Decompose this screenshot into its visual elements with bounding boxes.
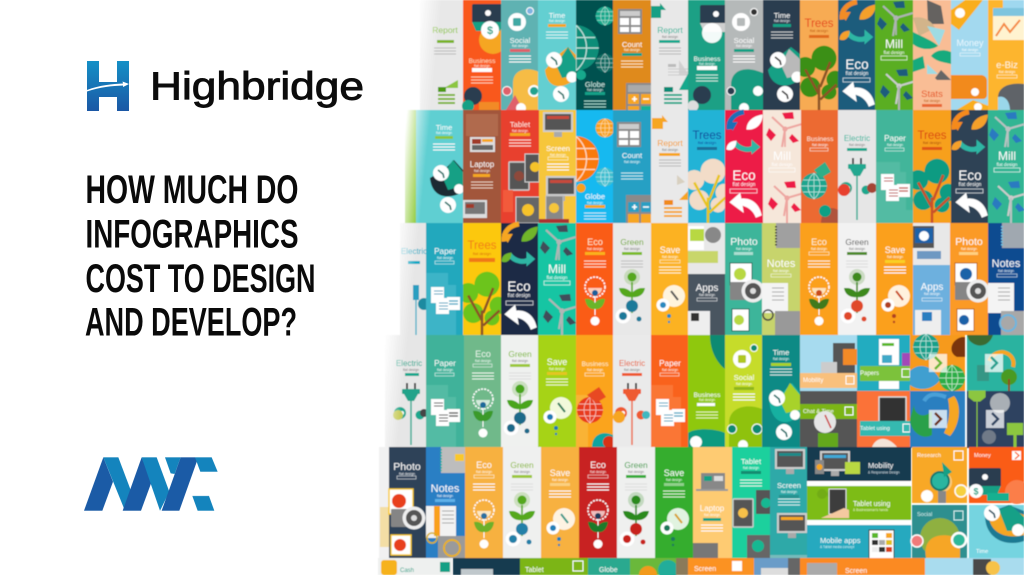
panel: Mobility banner navy: & Responsive Design (868, 470, 900, 474)
logo: MTC mark (84, 457, 218, 511)
panel: Green white row four: flat design (512, 359, 528, 363)
panel: Green white row five: Green (510, 460, 534, 470)
panel: Eco sage (464, 335, 501, 447)
panel: Mill green: flat design (884, 50, 905, 55)
panel: Count orange (613, 0, 651, 111)
panel: Photo navy row five: flat design (399, 472, 415, 476)
panel: Eco sage: flat design (475, 359, 491, 363)
panel: Green white row four (501, 335, 538, 447)
panel: Stats peach: Stats (921, 89, 943, 100)
panel: Green white: flat design (849, 247, 865, 251)
panel: Green white: Green (845, 237, 869, 247)
panel: Paper orange: flat design (662, 368, 678, 372)
panel: Screen banner orange: Screen (694, 566, 716, 573)
panel: Social teal: flat design (512, 44, 528, 48)
panel: Tablet using banner green (807, 486, 911, 520)
panel: Globe banner teal: Globe (599, 567, 618, 574)
title: COST TO DESIGN (86, 257, 316, 301)
panel: Mill teal (988, 110, 1024, 223)
panel: Count blue: Count (622, 151, 643, 160)
panel: Business amber: Business (582, 361, 609, 368)
panel: Laptop peach: flat design (704, 513, 720, 517)
panel: Screen teal: Screen (777, 481, 801, 490)
panel: Report orange: flat design (662, 148, 678, 152)
panel: Tablet using orange: Tablet using (860, 426, 890, 432)
panel: Screen yellow (539, 110, 576, 223)
panel: Tablet red: flat design (512, 129, 528, 133)
panel: Business amber: flat design (587, 368, 603, 372)
panel: Business orange: flat design (474, 64, 490, 68)
panel: Save green: flat design (666, 478, 682, 482)
fade of left collage edge (0, 0, 450, 447)
panel: Paper teal: Paper (884, 134, 906, 143)
panel: Time teal row two: flat design (436, 131, 452, 135)
panel: Report lime (420, 0, 463, 111)
panel: Eco navy: flat design (508, 293, 531, 299)
panel: Apps grey (688, 223, 725, 335)
panel: Tablet red (501, 110, 540, 223)
panel: Tablet banner green (520, 558, 588, 575)
panel: Photo teal (725, 223, 764, 335)
panel: Eco amber row five: Eco (476, 460, 492, 470)
panel: Notes lime: flat design (773, 269, 789, 273)
panel: laptop banner dark (453, 558, 520, 575)
panel: Photo teal: Photo (730, 236, 758, 248)
panel: Electric pale: Electric (619, 359, 645, 368)
panel: Count blue (613, 110, 651, 223)
panel: Save lime: flat design (549, 367, 565, 371)
panel: Save green (655, 447, 693, 558)
panel: Paper teal (876, 110, 913, 223)
panel: Cash banner (378, 558, 452, 575)
panel: Green white second: flat design (628, 470, 644, 474)
panel: lime sliver row two (405, 110, 419, 223)
panel: Screen yellow: flat design (550, 153, 566, 157)
panel: Save amber row five: flat design (552, 478, 568, 482)
panel: Chat and Time dark (800, 391, 857, 447)
panel: Mobility light blue (800, 335, 857, 391)
panel: Business orange row two: Business (807, 136, 834, 143)
title (85, 168, 316, 344)
panel: Save orange right: flat design (887, 255, 903, 259)
panel: Apps blue (913, 223, 950, 335)
panel: Eco red row five: flat design (590, 470, 606, 474)
panel: Paper cyan (426, 223, 464, 335)
panel: Mill turquoise: flat design (547, 275, 568, 280)
panel: Trees orange: Trees (918, 130, 947, 142)
panel: Paper green: Paper (434, 359, 456, 368)
panel: Social grey: Social (734, 36, 755, 45)
panel: Mobile apps banner teal: Mobile apps (820, 536, 861, 545)
panel: Mill teal: Mill (998, 149, 1016, 163)
panel: Eco red: flat design (733, 182, 756, 188)
panel: Green white second: Green (624, 460, 648, 470)
panel: Report teal: Report (657, 25, 683, 35)
panel: Money light blue (951, 0, 989, 111)
title: INFOGRAPHICS (86, 212, 298, 256)
panel: Paper cyan: flat design (437, 256, 453, 260)
panel: Tablet red: Tablet (510, 120, 531, 129)
panel: Globe sky blue: Globe (585, 192, 605, 201)
panel: Paper orange (651, 335, 688, 447)
panel: Laptop peach: Laptop (700, 504, 725, 513)
panel: Eco orange: Eco (587, 237, 603, 247)
panel: Time deep teal (762, 335, 800, 447)
panel: Save orange: Save (660, 245, 680, 255)
panel: Eco red row five (579, 447, 617, 558)
panel: Notes lime: Notes (767, 258, 796, 270)
panel: Electric pale (613, 335, 651, 447)
panel: Tablet using banner green: Tablet using (853, 501, 890, 508)
panel: Trees blue: flat design (698, 140, 716, 145)
panel: Screen banner orange two (800, 558, 925, 575)
panel: e-Biz orange: flat design (999, 70, 1015, 74)
panel: monitor banner blue (754, 558, 800, 575)
panel: Money tile: $ (973, 486, 979, 496)
panel: Eco dark: flat design (959, 182, 982, 188)
panel: Eco red row five: Eco (590, 460, 606, 470)
panel: Mill cream (763, 110, 804, 223)
panel: Social grey: flat design (736, 44, 752, 48)
panel: Business lime: Business (694, 392, 721, 399)
panel: Social tile (911, 505, 967, 558)
panel: Eco red (725, 110, 763, 223)
panel: Screen banner orange (688, 558, 754, 575)
panel: Mobile apps banner teal: & Tablet media concept (820, 545, 854, 549)
panel: Apps grey: flat design (699, 293, 715, 297)
panel: Save orange right: Save (885, 245, 905, 255)
panel: Paper teal: flat design (887, 143, 903, 147)
panel: Social tile: Social (917, 512, 932, 518)
panel: Business orange: $ (487, 25, 493, 37)
panel: Paper green: flat design (437, 368, 453, 372)
panel: Green white row four: Green (508, 349, 532, 359)
panel: Trees orange: flat design (923, 140, 941, 145)
panel: Laptop brown: Laptop (470, 160, 495, 169)
panel: Time light teal: flat design (549, 19, 565, 23)
panel: Eco dark: Eco (958, 168, 982, 183)
panel: Trees yellow (462, 222, 502, 336)
panel: faded strip left of row five (379, 447, 389, 558)
panel: Cash banner: Cash (400, 568, 414, 574)
panel: e-Biz orange (988, 0, 1024, 111)
panel: Mill teal: flat design (997, 162, 1018, 167)
collage of infographic panels (378, 0, 1024, 575)
panel: Notes blue (426, 447, 465, 558)
panel: Photo orange (950, 223, 990, 335)
panel: Time teal row two (416, 110, 464, 223)
panel: Eco sage: Eco (475, 349, 491, 359)
panel: Green white row five (503, 447, 541, 558)
panel: Money tile: Money (974, 453, 991, 459)
panel: Mill turquoise: Mill (548, 262, 566, 276)
panel: Laptop brown (463, 110, 501, 223)
panel: Globe dark teal: flat design (587, 88, 603, 92)
panel: e-Biz orange: e-Biz (996, 60, 1018, 71)
panel: Business green: Business (694, 56, 721, 63)
panel: pale blue banner (925, 558, 1024, 575)
panel: Count orange: flat design (624, 48, 640, 52)
title: HOW MUCH DO (86, 168, 298, 212)
panel: Time light teal (538, 0, 578, 111)
panel: Eco navy: Eco (507, 279, 531, 294)
panel: Time navy: Time (774, 11, 790, 20)
panel: Green white second (617, 447, 655, 558)
panel: Stats peach (913, 0, 951, 111)
panel: Green grey (613, 223, 651, 335)
panel: Notes blue: Notes (431, 483, 460, 495)
panel: Trees peach: flat design (810, 28, 828, 33)
panel: Report teal: flat design (662, 35, 678, 39)
panel: Trees blue: Trees (693, 130, 722, 142)
panel: Research tile (912, 447, 967, 503)
panel: Screen teal (770, 447, 807, 558)
panel: Photo navy row five: Photo (393, 461, 421, 473)
panel: Time navy: flat design (774, 19, 790, 23)
panel: Apps grey: Apps (696, 283, 718, 294)
panel: Mill green (875, 0, 916, 111)
panel: Eco orange: flat design (587, 247, 603, 251)
panel: Business lime: flat design (699, 398, 715, 402)
panel: Time light teal: Time (549, 11, 565, 20)
panel: Electric grey row four (385, 335, 428, 447)
panel: Stats peach: flat design (924, 99, 940, 103)
panel: Time tile (969, 505, 1024, 558)
panel: Mobility banner navy: Mobility (868, 461, 894, 470)
panel: Mill cream: flat design (772, 162, 793, 167)
panel: Report lime: Report (432, 25, 458, 35)
panel: Electric pale: flat design (624, 368, 640, 372)
panel: tile phone blue (910, 391, 965, 448)
panel: Social yellow green: flat design (736, 382, 752, 386)
panel: Screen banner orange two: Screen (845, 568, 867, 575)
panel: Time navy (763, 0, 802, 111)
panel: Eco orange row three right: flat design (811, 247, 827, 251)
panel: Time deep teal: flat design (773, 357, 789, 361)
panel: Save lime: Save (547, 357, 567, 367)
panel: Trees yellow: Trees (468, 240, 497, 252)
panel: Business orange: Business (469, 58, 496, 65)
panel: Electric grey (838, 110, 877, 223)
panel: Business green (688, 0, 732, 112)
panel: Paper orange: Paper (659, 359, 681, 368)
panel: Eco orange (576, 223, 613, 335)
panel: tile tree teal (967, 335, 1024, 391)
panel: Photo orange: Photo (955, 236, 983, 248)
panel: Save lime (538, 335, 576, 447)
panel: Money light blue: flat design (962, 48, 978, 52)
panel: Tablet banner green: Tablet (525, 567, 544, 574)
panel: Trees peach (799, 0, 839, 111)
panel: tile plug navy (967, 391, 1024, 448)
panel: Mobile apps banner teal (807, 525, 911, 560)
panel: Money light blue: Money (956, 38, 984, 48)
panel: Money tile (969, 447, 1024, 504)
panel: Green grey: Green (620, 237, 644, 247)
panel: Social yellow green (725, 335, 762, 450)
panel: Globe banner teal (588, 558, 630, 575)
panel: Electric grey row four: flat design (403, 368, 419, 372)
panel: Green grey: flat design (624, 247, 640, 251)
panel: Report orange (651, 110, 689, 223)
panel: Count blue: flat design (624, 160, 640, 164)
panel: Mill green: Mill (885, 37, 903, 51)
panel: Notes navy: flat design (998, 269, 1014, 273)
panel: Save orange (651, 223, 688, 335)
panel: Green white row five: flat design (514, 470, 530, 474)
panel: Eco amber row five: flat design (476, 470, 492, 474)
panel: Time tile: Time (976, 549, 988, 555)
panel: Business lime (688, 335, 725, 448)
panel: Trees orange (912, 110, 952, 224)
panel: Laptop brown: flat design (474, 169, 490, 173)
panel: Electric grey: Electric (844, 134, 870, 143)
panel: Business green: flat design (699, 62, 715, 66)
panel: Eco orange row three right: Eco (811, 237, 827, 247)
panel: Notes lime (762, 223, 800, 335)
panel: Trees yellow: flat design (473, 251, 491, 256)
panel: Save amber row five: Save (550, 468, 570, 478)
panel: Electric grey row four: Electric (396, 359, 422, 368)
panel: Mill turquoise (538, 223, 579, 335)
panel: multicolour banner (630, 558, 688, 575)
panel: Globe sky blue: flat design (587, 201, 603, 205)
panel: Screen teal: flat design (781, 490, 797, 494)
panel: Save orange: flat design (662, 255, 678, 259)
panel: Tablet mint (732, 447, 771, 558)
panel: Eco dark (951, 110, 988, 223)
panel: Mill cream: Mill (773, 149, 791, 163)
panel: Report orange: Report (657, 138, 683, 148)
panel: Chat and Time dark: Chat & Time (803, 409, 834, 415)
panel: Eco blue (838, 0, 876, 111)
panel: Globe sky blue (575, 109, 614, 224)
panel: Electric grey row three (400, 223, 430, 335)
panel: Globe dark teal: Globe (585, 80, 605, 89)
panel: Apps blue: flat design (924, 292, 940, 296)
panel: Time teal row two: Time (436, 123, 452, 132)
panel: Green white (838, 223, 876, 335)
panel: Business orange row two: flat design (812, 143, 828, 147)
panel: Eco blue: flat design (846, 71, 869, 77)
panel: Apps blue: Apps (921, 282, 943, 293)
panel: Notes navy: Notes (992, 258, 1021, 270)
panel: Research tile: Research (917, 453, 941, 459)
title: AND DEVELOP? (85, 300, 297, 344)
panel: Social yellow green: Social (734, 373, 755, 382)
panel: Business amber (576, 335, 615, 448)
panel: Tablet mint: flat design (743, 466, 759, 470)
panel: Tablet using orange (857, 391, 910, 447)
panel: Social teal: Social (510, 36, 531, 45)
panel: Social grey (725, 0, 763, 113)
panel: Save amber row five (541, 447, 579, 558)
panel: Save orange right (876, 223, 913, 335)
panel: Eco blue: Eco (845, 57, 869, 72)
panel: Laptop peach (693, 447, 732, 558)
panel: tile globe orange (910, 334, 965, 391)
panel: Count orange: Count (622, 40, 643, 49)
panel: Electric grey: flat design (849, 143, 865, 147)
panel: Notes blue: flat design (437, 494, 453, 498)
panel: Papers cyan: Papers (860, 371, 879, 377)
panel: Mobility light blue: Mobility (803, 378, 823, 384)
panel: Papers cyan (857, 335, 910, 391)
logo: Highbridge (87, 61, 364, 111)
panel: Business orange (462, 0, 507, 112)
panel: Mobility banner navy (807, 447, 911, 481)
panel: Social teal (501, 0, 539, 113)
icon: Highbridge H mark (87, 61, 129, 111)
wordmark: Highbridge: Highbridge (150, 66, 364, 108)
panel: Paper green (426, 335, 464, 447)
panel: Tablet mint: Tablet (741, 457, 762, 466)
panel: Electric grey row three: Electric (401, 247, 427, 256)
panel: Eco amber row five (465, 447, 503, 558)
panel: Trees peach: Trees (805, 18, 834, 30)
panel: Globe dark teal (575, 0, 614, 111)
panel: Save green: Save (664, 468, 684, 478)
panel: Eco navy (501, 223, 538, 335)
panel: Trees blue (687, 109, 726, 224)
panel: Eco orange row three right (800, 223, 838, 335)
panel: Report teal (651, 0, 690, 111)
panel: Photo navy row five (389, 447, 426, 558)
panel: Photo orange: flat design (961, 247, 977, 251)
panel: Tablet using banner green: & Businessman's hands (853, 508, 888, 512)
panel: Notes navy (988, 223, 1024, 335)
panel: white banner backing (807, 481, 911, 559)
panel: Screen yellow: Screen (546, 144, 570, 153)
panel: Paper cyan: Paper (434, 247, 456, 256)
panel: Time deep teal: Time (773, 348, 789, 357)
panel: Business orange row two (801, 110, 838, 223)
panel: Photo teal: flat design (736, 247, 752, 251)
panel: Eco red: Eco (732, 168, 756, 183)
